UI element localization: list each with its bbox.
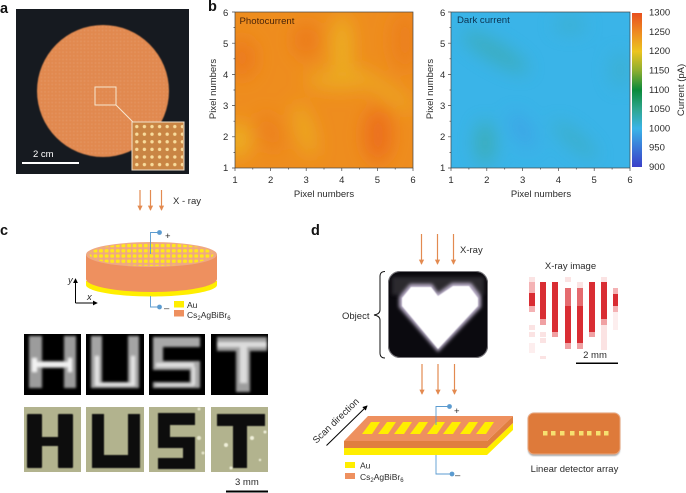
x tick labels [448,175,633,186]
x axis title: Pixel numbers [511,189,571,200]
x tick labels: 5 [375,175,380,186]
legend: AgBiBr [201,310,227,320]
y tick labels: 5 [223,39,228,50]
panel c: device diagram [0,223,231,322]
scan direction arrow [326,406,367,446]
legend: Au [360,460,371,470]
linear detector photo [528,413,620,456]
legend: AgBiBr [374,472,400,482]
legend: 2 [370,478,374,484]
x tick labels: 2 [484,175,489,186]
panel b: dark current heatmap [425,8,633,200]
panel c: optical photos of HUST letters [24,407,268,492]
x tick labels: 6 [410,175,416,186]
xy axes: y [67,275,74,286]
legend: 6 [400,478,404,484]
bracket [374,272,385,358]
heart object image [388,271,488,358]
label a: a [0,1,9,17]
gradient bar [632,13,642,167]
xy axes [67,275,97,303]
gold stripes [362,422,494,434]
letter U photo [86,407,144,472]
colour bar labels: 1150 [649,66,669,76]
top wire [150,230,162,254]
x tick labels: 6 [627,175,633,186]
bottom wire [150,296,162,309]
top orange surface [344,416,513,441]
colour bar labels: 1200 [649,46,670,57]
gold back layer [344,423,513,455]
heatmap label: Photocurrent [240,16,295,27]
heatmap field [226,10,420,168]
x tick labels: 5 [592,175,597,186]
letter T photo [211,407,268,472]
y tick labels [440,8,445,174]
top wire [436,404,452,425]
heading: X-ray image [545,261,596,272]
zoom box [95,87,116,105]
orange perovskite disc [37,25,169,157]
colour bar legend [632,8,686,173]
x tick labels: 2 [268,175,273,186]
scale label: 3 mm [235,477,259,488]
y tick labels: 3 [440,101,445,112]
colour bar labels [649,8,670,173]
legend [174,300,231,322]
perovskite body [86,254,217,292]
y tick labels: 6 [223,8,228,19]
scale bar [22,162,79,164]
y tick labels: 3 [223,101,228,112]
colour bar labels: 1000 [649,124,670,134]
legend: Cs [187,310,197,320]
minus sign: – [164,303,170,314]
y tick labels [223,8,228,174]
letter U image [86,334,144,395]
y tick labels: 1 [223,163,228,174]
legend [345,460,404,484]
y tick labels: 2 [223,132,228,143]
pixel columns [529,277,618,359]
x tick labels: 3 [520,175,525,186]
legend: Cs [360,472,370,482]
panel a: photo of disc [0,1,189,174]
letter H image [24,334,81,395]
y tick labels: 6 [440,8,445,19]
letter S photo [149,407,205,472]
scale bar [226,490,268,492]
x tick labels: 4 [339,175,344,186]
arrows: X-ray to panel c [140,190,201,210]
letter S image [149,334,205,395]
colour bar labels: 1100 [649,85,669,96]
minus sign: – [455,470,461,481]
colour bar labels: 1050 [649,104,670,115]
label d: d [311,223,320,239]
y axis title: Pixel numbers [208,59,219,119]
legend: 2 [197,316,201,322]
letter H photo [24,407,81,472]
scan direction label: Scan direction [311,396,362,446]
y tick labels: 5 [440,39,445,50]
x tick labels: 1 [448,175,454,186]
legend: 6 [227,316,231,322]
x tick labels [232,175,416,186]
y axis title: Pixel numbers [425,59,436,119]
panel d: linear detector diagram [311,396,620,484]
photo background [16,9,189,174]
x tick labels: 4 [556,175,561,186]
legend: Au [187,300,198,310]
plus sign: + [165,231,171,242]
axes [232,12,413,171]
panel b: photocurrent heatmap [208,0,420,200]
object label: Object [342,311,370,322]
top surface with gold dots [86,242,217,267]
colour bar labels: 1250 [649,27,670,38]
panel c: X-ray images of HUST letters [24,334,268,395]
colour bar labels: 900 [649,162,665,173]
X-ray label: X-ray [460,245,483,256]
xy axes: x [86,292,93,303]
y tick labels: 1 [440,163,445,174]
orange front and side [344,416,513,448]
y tick labels: 4 [223,70,228,81]
x tick labels: 3 [304,175,309,186]
panel d: X-ray image result [529,261,618,364]
letter T image [211,334,268,395]
scale label: 2 cm [33,149,54,160]
panel d: X-ray object [311,223,488,394]
colour bar labels: 1300 [649,8,670,18]
axes [448,12,630,171]
connector line [116,105,133,122]
bottom wire [436,455,454,476]
y tick labels: 4 [440,70,445,81]
x tick labels: 1 [232,175,238,186]
bottom gold electrode [86,281,217,296]
label c: c [0,223,8,239]
plus sign: + [454,406,460,417]
scale bar [576,362,618,364]
detector caption: Linear detector array [531,464,619,475]
top X-ray arrows [422,234,454,264]
lower X-ray arrows [422,364,454,394]
inset magnified dots [132,122,184,170]
arrows: X-ray to panel c: X - ray [173,196,201,207]
x axis title: Pixel numbers [294,189,354,200]
heatmap field [451,12,630,168]
scale label: 2 mm [583,350,607,361]
colour bar labels: 950 [649,142,665,154]
y tick labels: 2 [440,132,445,143]
heatmap label: Dark current [457,15,510,26]
